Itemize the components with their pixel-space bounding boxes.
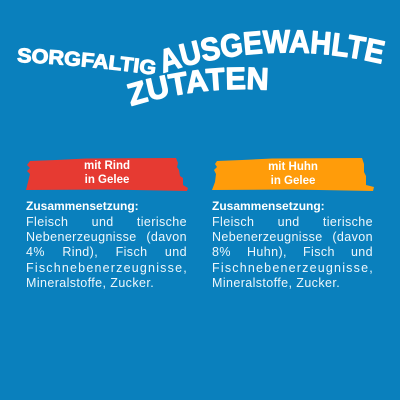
label: mit Huhn in Gelee: mit Huhn bbox=[268, 161, 318, 173]
heading: Zusammensetzung: Zusammensetzung: bbox=[212, 199, 325, 213]
text block: ingredients: Fischnebenerzeugnisse, bbox=[26, 261, 188, 275]
text block: ingredients bbox=[26, 215, 188, 290]
panel: mit Rind bbox=[26, 158, 188, 290]
title: SORGFALTIG bbox=[17, 48, 156, 75]
text block: ingredients: 4% Rind), Fisch und bbox=[26, 245, 187, 259]
title: ZUTATEN bbox=[126, 67, 268, 106]
heading: Zusammensetzung: Zusammensetzung: bbox=[26, 199, 139, 213]
banner: orange brush stroke bbox=[212, 158, 374, 191]
label: mit Rind in Gelee bbox=[84, 160, 130, 186]
banner: red brush stroke bbox=[26, 158, 188, 191]
title bbox=[17, 30, 386, 106]
label: mit Rind in Gelee: mit Rind bbox=[84, 160, 130, 172]
label: mit Huhn in Gelee bbox=[268, 161, 318, 186]
text block: ingredients: Fleisch und tierische bbox=[212, 215, 373, 229]
panel: mit Huhn bbox=[212, 158, 374, 290]
text block: ingredients: Mineralstoffe, Zucker. bbox=[212, 276, 340, 290]
text block: ingredients: 8% Huhn), Fisch und bbox=[212, 245, 373, 259]
text block: ingredients: Mineralstoffe, Zucker. bbox=[26, 276, 154, 290]
label: mit Huhn in Gelee: in Gelee bbox=[271, 174, 315, 186]
text block: ingredients: Fischnebenerzeugnisse, bbox=[212, 261, 374, 275]
title: AUSGEWAHLTE bbox=[163, 30, 386, 74]
text block: ingredients: Fleisch und tierische bbox=[26, 215, 187, 229]
text block: ingredients: Nebenerzeugnisse (davon bbox=[26, 230, 187, 244]
label: mit Rind in Gelee: in Gelee bbox=[85, 174, 129, 186]
text block: ingredients bbox=[212, 215, 374, 290]
text block: ingredients: Nebenerzeugnisse (davon bbox=[212, 230, 373, 244]
